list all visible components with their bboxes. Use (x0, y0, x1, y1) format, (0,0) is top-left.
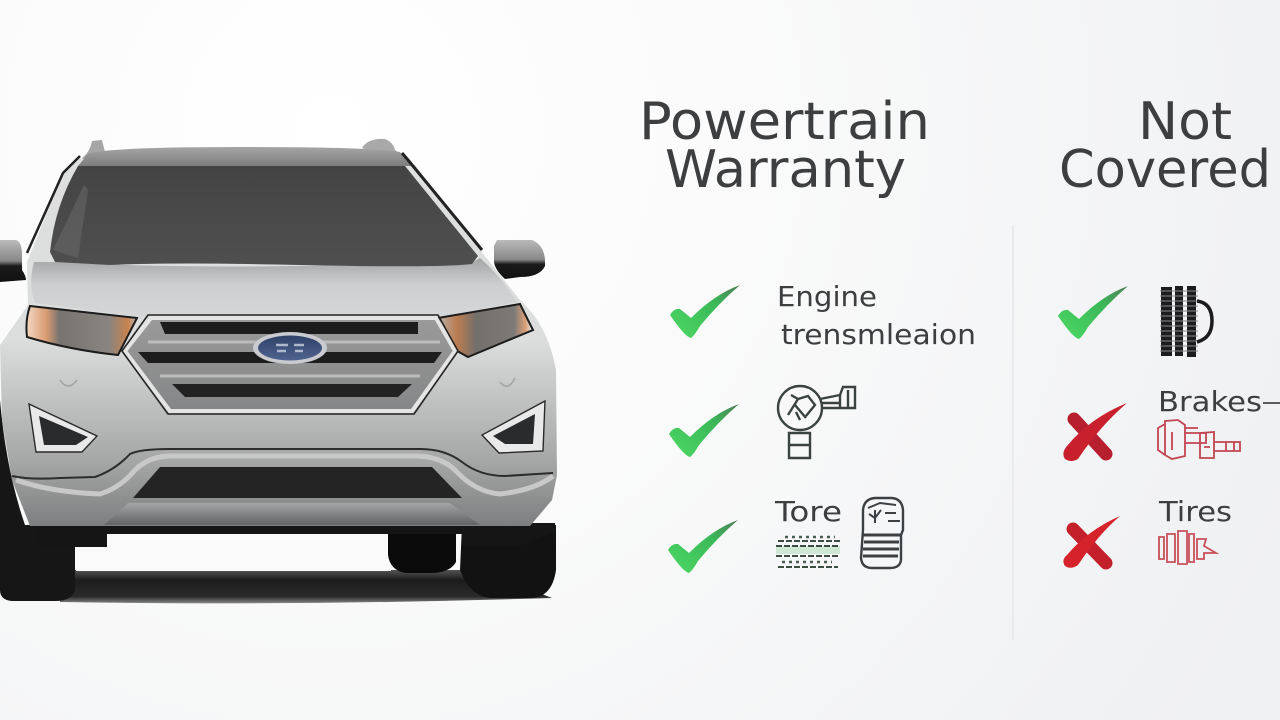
second stroke (1063, 403, 1127, 461)
windshield (50, 166, 478, 266)
underbody (35, 523, 555, 547)
check: engine (670, 285, 740, 338)
icon: tyre and engine block (861, 498, 903, 568)
grille frame (125, 318, 455, 411)
windshield reflection (53, 185, 88, 258)
left pillar (27, 156, 80, 253)
cross: tires (1063, 516, 1120, 568)
icon: green strip (776, 537, 840, 567)
left mirror (0, 240, 26, 282)
label: engine and transmission (777, 280, 976, 351)
left roof fin (82, 140, 105, 162)
car: front view of silver SUV (0, 139, 557, 603)
title line 2: Covered (1059, 140, 1271, 200)
ground shadow (60, 570, 552, 603)
title line 2: Warranty (665, 140, 906, 200)
hub (1197, 301, 1212, 342)
bumper crease (12, 449, 553, 479)
label line 1: Engine (777, 280, 877, 313)
right pillar (402, 153, 482, 250)
right fog lamp (493, 414, 535, 444)
panel: not covered items (1058, 286, 1280, 568)
right fog housing (482, 401, 545, 453)
right tyre (460, 525, 556, 598)
hood (31, 258, 517, 318)
bumper highlight (16, 456, 553, 494)
lower slat (172, 384, 412, 397)
cross: brakes (1063, 403, 1127, 461)
white gap under the bumper (76, 533, 391, 571)
title: Not Covered (1059, 92, 1271, 200)
check: tyre (1058, 286, 1128, 339)
label: torque: Tore (774, 495, 842, 528)
parking sensors (60, 378, 515, 386)
lower intake (133, 467, 462, 498)
roof (78, 147, 412, 166)
left tyre (0, 400, 75, 601)
rear axle shadow (388, 528, 456, 573)
Ford-style badge (253, 332, 327, 364)
second stroke (1063, 516, 1120, 568)
label: tires: Tires (1158, 495, 1232, 528)
middle slat (138, 352, 442, 363)
tread (1161, 286, 1196, 357)
dash after brakes (1263, 402, 1280, 404)
icon: turbocharger (778, 386, 855, 458)
headlight left (26, 306, 137, 355)
icon: brake assembly (1158, 420, 1240, 459)
right roof fin (362, 139, 410, 160)
label line 2: trensmleaion (781, 318, 976, 351)
first stroke (1073, 529, 1106, 563)
divider between columns (1012, 225, 1014, 640)
title line 1: Not (1138, 92, 1232, 152)
icon: red parts (1159, 531, 1216, 564)
right mirror (494, 240, 545, 279)
grille (122, 315, 458, 414)
badge mark (276, 345, 304, 351)
headlight right (438, 304, 533, 357)
body shell (0, 158, 557, 526)
badge rim (253, 332, 327, 364)
check: torque (668, 520, 738, 573)
badge oval (258, 336, 322, 360)
grille outline (122, 315, 458, 414)
left fog lamp (39, 416, 88, 445)
title: Powertrain Warranty (639, 92, 930, 200)
title line 1: Powertrain (639, 92, 930, 152)
tread grooves (1160, 291, 1198, 351)
left fog housing (29, 404, 97, 452)
first stroke (1074, 419, 1106, 454)
top slat (160, 322, 418, 334)
skid plate (104, 503, 480, 525)
label: brakes: Brakes (1158, 385, 1262, 418)
icon: black tyre (1160, 286, 1212, 357)
check: turbo (669, 404, 739, 457)
chrome bars (148, 342, 440, 376)
panel: powertrain covered items (668, 280, 976, 573)
